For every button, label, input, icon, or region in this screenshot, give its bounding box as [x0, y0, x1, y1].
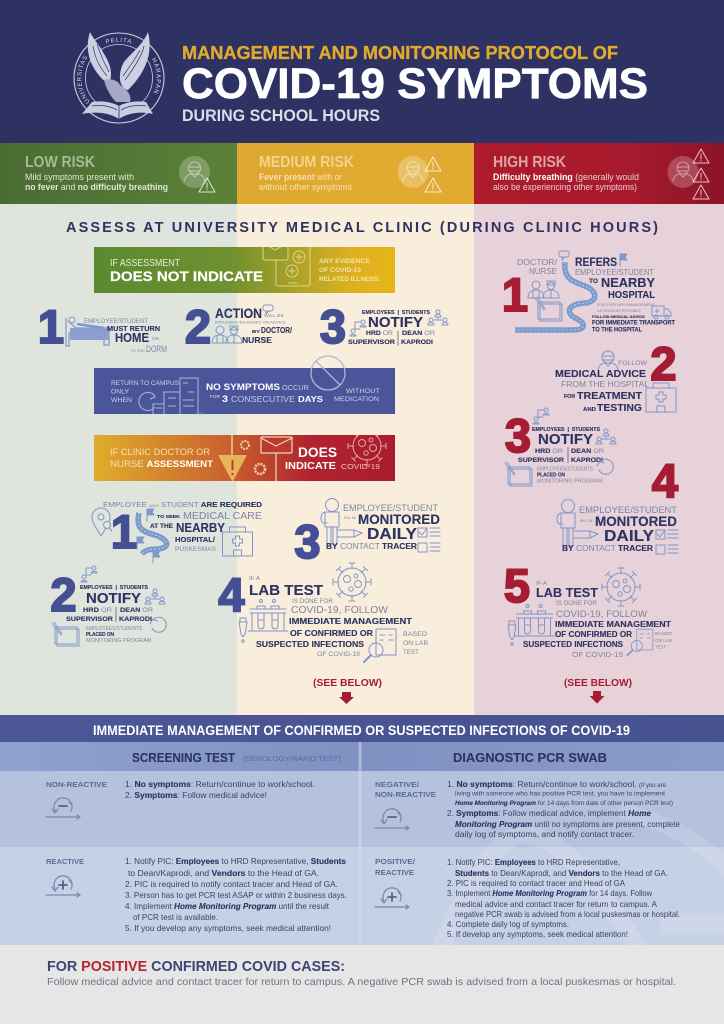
text: any evidence	[319, 258, 380, 283]
text: based on lab test: BASED	[655, 631, 673, 636]
text: notify: SUPERVISOR	[348, 339, 395, 346]
text: without medication: MEDICATION	[334, 396, 379, 403]
text: lab test: IS DONE FOR	[292, 599, 334, 605]
text: medium risk description: without other symptoms	[258, 182, 352, 193]
left step 3: monitored daily	[294, 498, 440, 568]
text: seek medical care: PUSKESMAS	[175, 546, 216, 553]
icon: university crest logo: PELITA	[106, 38, 131, 44]
text: monitoring program: EMPLOYEES/STUDENTS	[86, 626, 143, 632]
icon: minus loop	[46, 798, 80, 819]
icon: bed	[66, 317, 109, 346]
text: action by doctor: IMPLEMENTED BASED ON ADVICE	[215, 320, 286, 324]
text: monitoring program	[537, 466, 604, 484]
list: negative instructions: daily log of symptoms, and notify contact tracer.	[455, 829, 634, 839]
text: seek medical care: HOSPITAL/	[175, 535, 216, 544]
text: no symptoms occur	[206, 382, 323, 404]
icon: chat bubble	[263, 305, 273, 314]
text: notify: KAPRODI	[119, 616, 152, 623]
left step 1: seek medical care	[92, 502, 262, 563]
text: notify: SUPERVISOR	[518, 457, 564, 464]
text: see below: (SEE BELOW)	[564, 677, 632, 689]
list: negative instructions: 1. No symptoms: Return/continue to work/school. (If you are	[447, 779, 667, 789]
panel: high risk	[474, 143, 724, 204]
text: high risk description: also be experiencing other symptoms)	[493, 182, 637, 193]
cell: pcr negative: NON-REACTIVE	[375, 790, 436, 799]
icon: checklist	[418, 528, 440, 552]
text: if clinic doctor or nurse assessment: IF CLINIC DOCTOR OR	[110, 447, 211, 457]
table header row: SCREENING TEST	[132, 750, 235, 765]
text: must return home: EMPLOYEE/STUDENT	[84, 318, 148, 325]
number 2: 2	[50, 568, 77, 621]
text: refers to nearby hospital: AS SOON AS POSSIBLE	[597, 308, 641, 313]
right step 4: monitored daily	[557, 454, 678, 554]
text: if clinic doctor or nurse assessment: NURSE ASSESSMENT	[110, 459, 214, 469]
icon: notepad	[505, 462, 532, 486]
icon: hierarchy	[533, 408, 549, 424]
title: DURING SCHOOL HOURS	[182, 107, 380, 125]
heading: immediate management: IMMEDIATE MANAGEMENT OF CONFIRMED OR SUSPECTED INFECTIONS OF COVID-19	[93, 723, 630, 738]
text: lab test: COVID-19, FOLLOW	[556, 609, 647, 620]
number 2: 2	[185, 300, 211, 353]
text: follow medical advice: TREATMENT	[577, 390, 643, 402]
arrow: see below	[590, 691, 604, 704]
icon: checklist	[656, 530, 678, 554]
icon: people	[428, 310, 448, 325]
icon: university crest logo	[73, 32, 165, 124]
table header row: (SEROLOGY/RAPID TEST)	[243, 756, 341, 763]
icon: circular arrow	[597, 459, 613, 474]
text: does indicate covid-19	[285, 445, 380, 472]
text: monitored daily: MONITORED	[595, 514, 677, 529]
icon: hierarchy	[81, 566, 97, 582]
text: no symptoms occur: OCCUR	[282, 383, 310, 392]
text: refers to nearby hospital: NEARBY	[601, 275, 655, 290]
text: no symptoms occur: DAYS	[298, 394, 323, 404]
list: positive instructions: 4. Complete daily log of symptoms.	[447, 919, 569, 929]
icon: masked face	[598, 351, 618, 370]
icon: return arrow and campus buildings	[139, 378, 202, 414]
icon: warning triangle and envelope	[218, 435, 292, 482]
text: lab test: OF CONFIRMED OR	[290, 628, 373, 638]
text: follow medical advice: FOR	[564, 394, 575, 400]
icon: university crest logo: UNIVERSITAS	[77, 56, 89, 104]
text: lab test	[523, 581, 671, 659]
panel: medium risk	[237, 143, 474, 204]
icon: person with pencil	[557, 500, 598, 546]
text: no symptoms occur: FOR	[210, 394, 221, 399]
text: monitored daily: BY CONTACT TRACER	[326, 542, 417, 551]
text: seek medical care: NEARBY	[176, 521, 226, 535]
icon: flag	[620, 254, 627, 266]
text: notify: NOTIFY	[86, 591, 141, 607]
list: positive instructions: 5. If develop any symptoms, seek medical attention!	[447, 929, 628, 939]
cell: screening non-reactive: NON-REACTIVE	[46, 780, 107, 789]
text: without medication	[334, 388, 380, 403]
text: monitoring program	[86, 626, 153, 644]
text: must return home: TO THE	[130, 348, 145, 353]
list: negative instructions: living with someone who has positive PCR test, you have to implement	[455, 792, 665, 798]
text: refers to nearby hospital: REFERS	[575, 257, 617, 269]
list: reactive instructions: 3. Person has to get PCR test ASAP or within 2 business days.	[125, 890, 347, 900]
text: monitoring program: PLACED ON	[537, 472, 565, 478]
icon: virus	[333, 563, 371, 601]
heading: high risk: HIGH RISK	[493, 154, 567, 171]
list: positive instructions: 2. PIC is required to contact tracer and Head of GA	[447, 878, 625, 888]
text: lab test: SUSPECTED INFECTIONS	[256, 639, 364, 649]
icon: notepad	[535, 297, 562, 321]
text: follow medical advice: AND	[583, 407, 596, 413]
text: monitored daily: DAILY	[604, 528, 654, 545]
text: monitored daily: MONITORED	[358, 512, 440, 527]
number 1: 1	[38, 300, 64, 353]
step 3: notify	[320, 300, 448, 353]
text: seek medical care: EMPLOYEE AND STUDENT ARE REQUIRED	[103, 502, 262, 509]
text: monitored daily: EMPLOYEE/STUDENT	[579, 505, 677, 516]
list: reactive instructions: 5. If you develop any symptoms, seek medical attention!	[125, 923, 331, 933]
cell: pcr positive	[375, 857, 680, 939]
text: notify: HRD OR	[366, 330, 393, 337]
text: monitoring program: PLACED ON	[86, 632, 114, 638]
banner: return to campus	[94, 356, 395, 414]
text: monitored daily	[326, 503, 440, 551]
heading: for positive confirmed covid cases: FOR POSITIVE CONFIRMED COVID CASES:	[47, 958, 345, 975]
text: notify: EMPLOYEES | STUDENTS	[80, 585, 149, 591]
text: doctor nurse	[517, 258, 558, 276]
icon: chat bubble	[559, 251, 569, 260]
text: monitoring program: MONITORING PROGRAM.	[537, 478, 604, 484]
icon: road and flags	[137, 509, 167, 563]
text: monitoring program: EMPLOYEES/STUDENTS	[537, 466, 594, 472]
cell: pcr positive: REACTIVE	[375, 868, 414, 877]
text: lab test: SUSPECTED INFECTIONS	[523, 640, 624, 649]
icon: location pin	[92, 508, 112, 536]
text: monitored daily	[562, 505, 677, 553]
title	[182, 42, 648, 125]
text: without medication: WITHOUT	[346, 388, 380, 395]
text: action by doctor: BY	[252, 329, 260, 334]
panel: low risk	[0, 143, 237, 204]
text: does indicate covid-19: DOES	[298, 445, 337, 460]
text: seek medical care: MEDICAL CARE	[183, 510, 262, 522]
text: any evidence: ANY EVIDENCE	[319, 258, 371, 265]
text: see below: (SEE BELOW)	[313, 677, 382, 689]
section: immediate management	[0, 715, 724, 950]
text: if clinic doctor or nurse assessment	[110, 447, 214, 469]
text: lab test: IF A	[249, 576, 261, 582]
list: positive instructions: Students to Dean/Kaprodi, and Vendors to the Head of GA.	[455, 868, 668, 878]
text: action by doctor: ACTION	[215, 306, 262, 321]
text: monitored daily: WILL BE	[344, 516, 356, 520]
number 3: 3	[505, 409, 531, 462]
text: must return home	[84, 318, 167, 355]
icon: notepad	[52, 622, 79, 646]
cell: screening non-reactive	[46, 779, 315, 819]
text: must return home: DORM	[146, 344, 167, 355]
icon: minus loop	[375, 809, 409, 830]
text: any evidence: OF COVID-19	[319, 267, 361, 274]
text: low risk description: no fever and no difficulty breathing	[25, 182, 168, 193]
text: refers to nearby hospital: HOSPITAL	[608, 290, 655, 301]
number 3: 3	[294, 515, 321, 568]
text: notify	[66, 585, 153, 623]
text: any evidence: RELATED ILLNESS:	[319, 276, 380, 283]
text: notify: HRD OR	[83, 607, 112, 614]
icon: plus loop	[375, 888, 409, 909]
text: monitoring program: MONITORING PROGRAM.	[86, 638, 153, 644]
text: lab test: OF CONFIRMED OR	[555, 630, 632, 639]
text: does indicate covid-19: INDICATE	[285, 461, 336, 472]
list: reactive instructions: to Dean/Kaprodi, and Vendors to the Head of GA.	[128, 868, 319, 878]
text: lab test: OF COVID-19	[572, 652, 623, 659]
icon: circular arrow	[150, 617, 166, 632]
icon: road	[515, 262, 595, 330]
left step 4: lab test	[218, 563, 428, 704]
heading: assess at clinic: ASSESS AT UNIVERSITY MEDICAL CLINIC (DURING CLINIC HOURS)	[66, 220, 658, 236]
text: low risk description: Mild symptoms present with	[25, 172, 134, 183]
icon: people	[145, 589, 165, 604]
text: refers to nearby hospital: FOR FURTHER MANAGEMENT	[597, 302, 656, 307]
left step 2: notify	[50, 566, 166, 646]
icon: ambulance	[652, 306, 671, 319]
icon: virus	[602, 568, 640, 606]
text: follow medical advice	[555, 360, 650, 414]
text: seek medical care	[103, 502, 262, 553]
text: lab test: OF COVID-19	[317, 652, 361, 658]
icon: people	[596, 429, 616, 444]
cell: pcr positive: POSITIVE/	[375, 857, 416, 866]
list: reactive instructions	[125, 856, 347, 933]
list: positive instructions: negative PCR swab is advised from a local puskesmas or hospital.	[455, 909, 680, 919]
step 2: action	[185, 300, 293, 353]
text: notify: DEAN OR	[402, 330, 435, 337]
text: notify: EMPLOYEES | STUDENTS	[532, 427, 601, 433]
icon: plus loop	[46, 876, 80, 897]
text: follow medical advice: FROM THE HOSPITAL	[561, 380, 650, 389]
text: follow medical advice: MEDICAL ADVICE	[555, 369, 646, 380]
list: non-reactive instructions: 1. No symptoms: Return/continue to work/school.	[125, 779, 315, 789]
text: must return home: HOME	[115, 331, 149, 345]
text: notify: EMPLOYEES | STUDENTS	[362, 310, 431, 316]
icon: phone with crosses	[262, 247, 310, 286]
right step 1: refers	[502, 251, 675, 334]
list: non-reactive instructions: 2. Symptoms: Follow medical advice!	[125, 790, 267, 800]
text: lab test: LAB TEST	[536, 585, 598, 600]
text: notify: KAPRODI	[401, 339, 433, 346]
list: positive instructions: medical advice and contact tracer for return to campus. A	[455, 899, 657, 909]
list: reactive instructions: 4. Implement Home Monitoring Program until the result	[125, 901, 330, 911]
cell: screening reactive	[46, 856, 347, 933]
text: does indicate covid-19: COVID-19	[341, 462, 380, 471]
icon: dropper	[239, 618, 247, 642]
list: negative instructions: Home Monitoring Program for 14 days from date of other person PCR test)	[455, 801, 673, 807]
text: notify: NOTIFY	[538, 432, 593, 448]
list: non-reactive instructions	[125, 779, 315, 800]
right step 3: notify	[505, 408, 616, 486]
icon: doctor and nurse	[528, 281, 559, 298]
text: notify: DEAN OR	[571, 448, 604, 455]
text: return to campus only when: WHEN	[111, 397, 132, 404]
text: lab test: IMMEDIATE MANAGEMENT	[289, 616, 413, 626]
list: reactive instructions: of PCR test is available.	[133, 912, 218, 922]
list: negative instructions: Monitoring Program until no symptoms are present, complete	[455, 819, 680, 829]
icon: dropper	[508, 621, 516, 645]
text: no symptoms occur: NO SYMPTOMS	[206, 382, 280, 392]
text: refers to nearby hospital	[575, 257, 675, 334]
text: action by doctor: NURSE	[242, 335, 272, 345]
arrow: see below	[339, 692, 354, 704]
title: COVID-19 SYMPTOMS	[182, 60, 648, 108]
icon: masked person low risk	[179, 156, 215, 192]
text: footer advice: Follow medical advice and contact tracer for return to campus. A negative PCR swab is advised from a local puskesmas or hospital.	[47, 976, 676, 988]
right step 2: follow medical advice	[555, 337, 677, 414]
table header row: DIAGNOSTIC PCR SWAB	[453, 750, 607, 765]
list: positive instructions: 3. Implement Home Monitoring Program for 14 days. Follow	[447, 888, 653, 898]
text: no symptoms occur: 3	[222, 394, 228, 404]
text: medium risk description: Fever present with or	[259, 172, 342, 183]
text: low risk description	[25, 172, 168, 193]
text: must return home: OR	[152, 336, 160, 341]
heading: medium risk: MEDIUM RISK	[259, 154, 355, 171]
icon: hospital	[222, 527, 252, 556]
number 1: 1	[111, 505, 137, 558]
list: negative instructions	[447, 779, 680, 839]
text: medium risk description	[258, 172, 352, 193]
text: notify: KAPRODI	[571, 457, 603, 464]
header banner	[0, 0, 724, 143]
number 4: 4	[652, 454, 678, 507]
table header row	[0, 742, 724, 771]
text: seek medical care: AT THE	[150, 524, 173, 530]
text: notify: NOTIFY	[368, 315, 423, 331]
background columns	[0, 204, 724, 715]
text: lab test: LAB TEST	[249, 582, 323, 599]
text: return to campus only when	[111, 380, 180, 404]
number 2: 2	[650, 337, 677, 390]
text: if assessment does not indicate	[110, 258, 263, 284]
icon: university crest logo: HARAPAN	[152, 58, 161, 94]
text: monitored daily: WILL BE	[580, 519, 593, 523]
text: refers to nearby hospital: EMPLOYEE/STUDENT	[575, 268, 654, 277]
text: lab test: COVID-19, FOLLOW	[291, 605, 389, 616]
text: refers to nearby hospital: TO	[589, 279, 598, 285]
text: lab test: IS DONE FOR	[556, 601, 598, 607]
text: if assessment does not indicate: DOES NOT INDICATE	[110, 268, 263, 284]
text: if assessment does not indicate: IF ASSESSMENT	[110, 258, 180, 269]
text: no symptoms occur: CONSECUTIVE	[231, 394, 295, 404]
cell: pcr negative	[375, 779, 680, 839]
cell: pcr negative: NEGATIVE/	[375, 780, 420, 789]
icon: test tubes	[514, 604, 554, 636]
text: doctor nurse: DOCTOR/	[517, 258, 558, 267]
text: based on lab test: TEST	[403, 649, 419, 656]
icon: magnifier on document	[627, 629, 653, 656]
list: positive instructions: 1. Notify PIC: Employees to HRD Representative,	[447, 857, 620, 867]
text: action by doctor	[215, 306, 293, 345]
text: high risk description: Difficulty breathing (generally would	[493, 172, 639, 183]
text: monitored daily: BY CONTACT TRACER	[562, 544, 653, 553]
heading: low risk: LOW RISK	[25, 154, 96, 171]
text: based on lab test: ON LAB	[403, 640, 428, 647]
number 1: 1	[502, 268, 528, 321]
list: positive instructions	[447, 857, 680, 939]
step 1: must return home	[38, 300, 167, 355]
text: lab test	[249, 576, 413, 658]
icon: prohibition sign	[311, 356, 345, 390]
text: notify	[348, 310, 435, 346]
text: refers to nearby hospital: FOLLOW MEDICAL ADVICE	[592, 314, 645, 319]
text: based on lab test: TEST	[655, 644, 666, 650]
banner: does indicate	[94, 435, 395, 481]
text: monitored daily: EMPLOYEE/STUDENT	[343, 503, 438, 514]
icon: masked person medium risk	[398, 156, 441, 192]
text: notify: SUPERVISOR	[66, 616, 113, 623]
icon: person with pencil	[321, 498, 362, 545]
text: based on lab test: ON LAB	[655, 638, 672, 643]
footer: positive confirmed cases	[0, 945, 724, 1024]
icon: doctor and nurse	[212, 326, 242, 343]
number 5: 5	[504, 559, 530, 612]
text: based on lab test: BASED	[403, 631, 427, 638]
text: high risk description	[493, 172, 639, 193]
text: must return home: MUST RETURN	[107, 326, 160, 333]
number 4: 4	[218, 568, 245, 621]
icon: virus	[348, 435, 386, 466]
text: refers to nearby hospital: FOR IMMEDIATE TRANSPORT	[592, 320, 675, 326]
list: reactive instructions: 1. Notify PIC: Employees to HRD Representative, Students	[125, 856, 346, 866]
text: based on lab test	[655, 631, 673, 650]
text: seek medical care: TO SEEK	[157, 514, 181, 519]
text: return to campus only when: RETURN TO CAMPUS	[111, 380, 180, 387]
text: lab test: IF A	[536, 581, 548, 587]
right step 5: lab test	[504, 559, 673, 704]
title: MANAGEMENT AND MONITORING PROTOCOL OF	[182, 42, 618, 63]
number 3: 3	[320, 300, 346, 353]
text: action by doctor: WILL BE	[264, 313, 284, 318]
text: follow medical advice: TESTING	[597, 402, 642, 414]
text: doctor nurse: NURSE	[529, 267, 557, 276]
icon: magnifier on document	[364, 629, 396, 662]
text: notify: HRD OR	[535, 448, 563, 455]
icon: hospital	[646, 383, 676, 412]
text: notify: DEAN OR	[120, 607, 153, 614]
text: refers to nearby hospital: TO THE HOSPITAL	[592, 328, 642, 334]
icon: masked person high risk	[668, 149, 709, 199]
text: monitored daily: DAILY	[367, 526, 417, 543]
text: notify	[518, 427, 604, 464]
text: based on lab test	[403, 631, 428, 656]
icon: hierarchy	[350, 320, 366, 336]
cell: screening reactive: REACTIVE	[46, 857, 84, 866]
list: negative instructions: 2. Symptoms: Follow medical advice, implement Home	[447, 808, 651, 818]
banner: does not indicate	[94, 247, 395, 293]
table row backgrounds	[0, 742, 724, 950]
icon: test tubes	[248, 600, 288, 631]
text: follow medical advice: FOLLOW	[618, 360, 648, 367]
list: reactive instructions: 2. PIC is required to notify contact tracer and Head of GA.	[125, 879, 338, 889]
text: lab test: IMMEDIATE MANAGEMENT	[555, 620, 671, 629]
text: action by doctor: DOCTOR/	[261, 325, 293, 335]
text: return to campus only when: ONLY	[111, 388, 130, 396]
